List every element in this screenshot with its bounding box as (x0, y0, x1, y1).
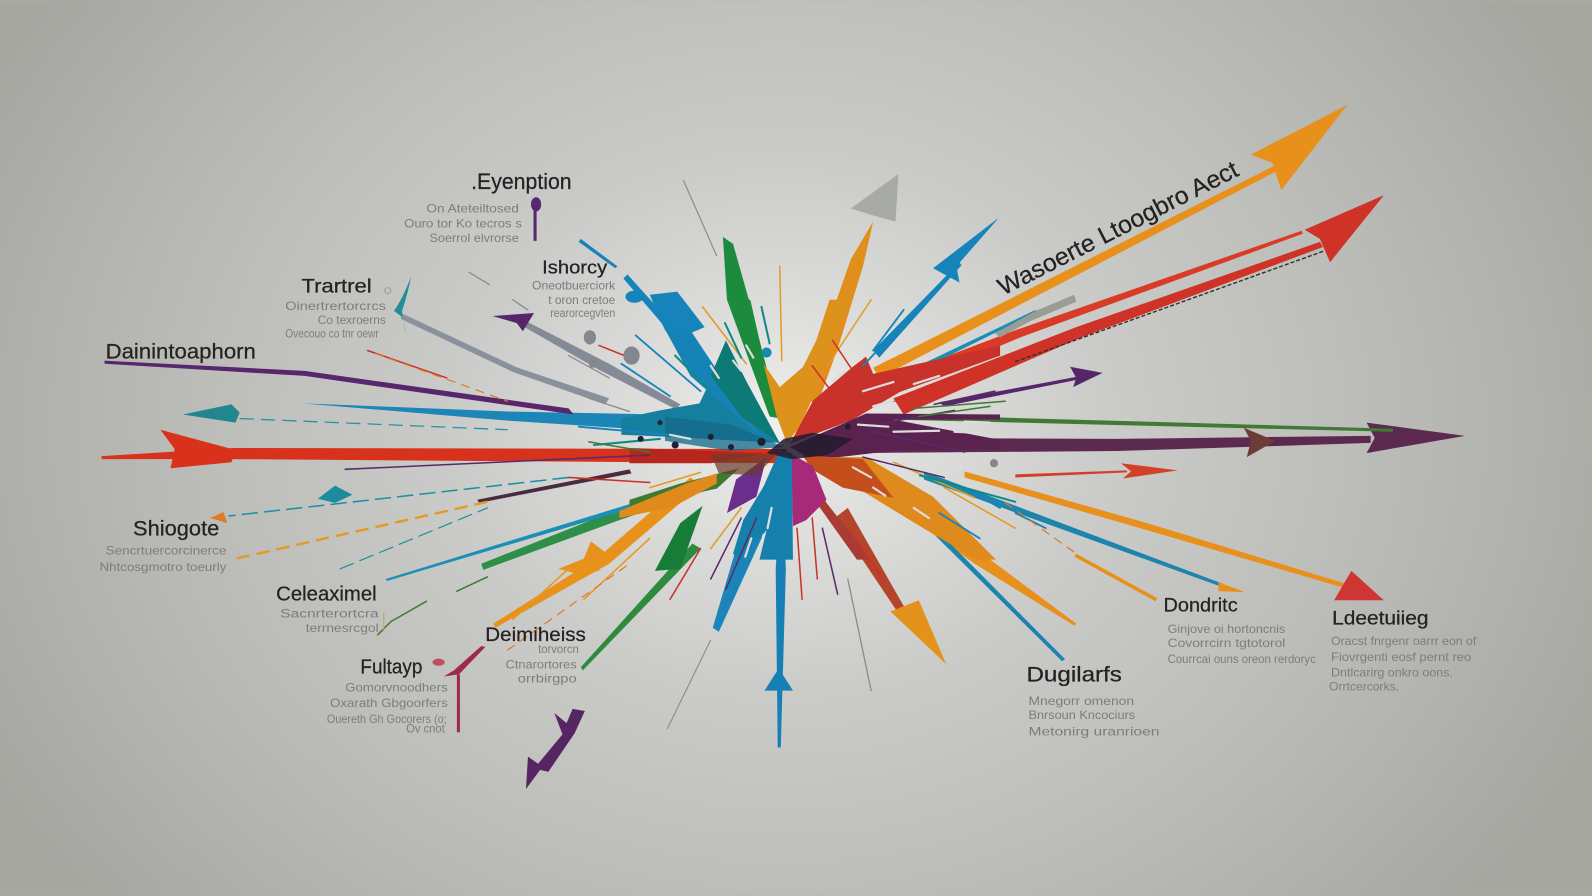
arrow: black dashed line (1015, 251, 1324, 362)
label: Celeaximel: terrnesrcgol (306, 621, 379, 635)
label: Fultayp: Ouereth Gh Gocorers (o; (327, 712, 447, 726)
label: Eyenption: On Ateteiltosed (426, 201, 519, 215)
label: Trartrel (285, 277, 391, 340)
label: Eyenption (404, 169, 572, 245)
arrow: teal left with orange tip (210, 477, 569, 523)
arrow: grey left with teal head (394, 276, 609, 404)
arrow: red top right (873, 195, 1384, 414)
arrow: blue down (765, 477, 793, 748)
arrow: blue lower right thin (936, 532, 1065, 661)
label: Deimiheiss: Ctnarortores (506, 657, 577, 671)
arrow: orange lower right with red head (965, 471, 1384, 600)
label: Ldeetuiieg: Dntlcarirg onkro oons. (1331, 665, 1453, 679)
label: Fultayp: Fultayp (360, 656, 422, 678)
label: Ldeetuiieg: Ldeetuiieg (1332, 609, 1429, 630)
streak: blue left lower (386, 492, 674, 581)
label: Deimiheiss: Deimiheiss (485, 625, 586, 646)
streak: purple to orange dashed (236, 469, 632, 559)
drop: blue near center (761, 347, 772, 358)
arrow: orange lower right thin (883, 488, 1076, 626)
label: Trartrel: Co texroerns (318, 313, 386, 327)
label: Dondritc: Dondritc (1164, 595, 1238, 616)
arrow: blue lower right with orange tip (924, 471, 1245, 592)
arrow: orange lower left (493, 477, 701, 628)
label: Shiogote: Nhtcosgmotro toeurly (100, 560, 227, 574)
label: Dugilarfs: Mnegorr omenon (1029, 694, 1134, 708)
arrow: purple head with grey shaft (492, 313, 680, 409)
label: Fultayp: Oxarath Gbgoorfers (330, 696, 448, 710)
arrow: green left lower (481, 477, 721, 570)
label: Trartrel: Ovecouo co tnr oewr (285, 326, 379, 340)
label: Ishorcy (532, 256, 616, 320)
streak: blue left (303, 403, 660, 431)
label: Dondritc: Covorrcirn tgtotorol (1168, 636, 1285, 650)
label: Eyenption: Soerrol elvrorse (429, 231, 519, 245)
grey drops (584, 330, 998, 467)
arrow: red left main (102, 430, 787, 468)
speckle gaps in burst (640, 345, 990, 557)
label: Deimiheiss (485, 625, 586, 686)
arrow: big orange down right (835, 508, 946, 664)
label: Trartrel: Oinertrertorcrcs (285, 299, 386, 313)
streak: blue down left (667, 498, 772, 729)
label: Dugilarfs (1026, 663, 1159, 738)
label: Dondritc: Courrcai ouns oreon rerdoryc (1168, 652, 1316, 666)
label: Dugilarfs: Metonirg uranrioen (1029, 724, 1159, 738)
streak: thin grey top (683, 180, 717, 256)
label: Deimiheiss: orrbirgpo (518, 672, 577, 686)
label: Ishorcy: t oron cretoe (548, 293, 615, 307)
label: Dainintoaphorn: Dainintoaphorn (106, 340, 256, 364)
label: Eyenption: .Eyenption (471, 169, 572, 194)
arrow: purple right main (853, 423, 1465, 457)
arrow: blue top right (873, 218, 999, 358)
label: Deimiheiss: torvorcn (538, 642, 579, 656)
arrow: green top (723, 237, 780, 419)
label: Celeaximel (276, 583, 379, 635)
streak: teal and grey under orange arrow (902, 295, 1076, 377)
label: Ishorcy: rearorcegvten (550, 306, 615, 320)
marker: tan bracket (383, 612, 385, 632)
label: Shiogote: Shiogote (133, 516, 219, 540)
label: Ldeetuiieg: Fiovrgenti eosf pernt reo (1331, 650, 1471, 664)
streak: orange dashed (1074, 554, 1157, 601)
label: Ldeetuiieg: Orrtcercorks. (1329, 680, 1399, 694)
label: Ishorcy: Ishorcy (542, 256, 608, 277)
arrow: small red right (1015, 463, 1178, 478)
arrow: green lower left (581, 506, 703, 670)
splatter: fine strands (340, 266, 1076, 691)
arrow: purple left top (105, 361, 574, 414)
label: Ishorcy: Oneotbuerciork (532, 279, 616, 293)
label: Dondritc (1164, 595, 1316, 666)
arrow: small purple right (939, 367, 1103, 406)
marker: maroon arrow (433, 646, 485, 732)
arrow: purple bottom (526, 709, 585, 789)
arrow: blue upper left (579, 239, 751, 419)
arrow: green right line (893, 414, 1393, 432)
label: Celeaximel: Sacnrterortcra (280, 607, 379, 621)
arrow: teal left dashed (183, 404, 508, 430)
label: Celeaximel: Celeaximel (276, 583, 377, 605)
label: Fultayp (327, 656, 448, 735)
label: Shiogote: Sencrtuercorcinerce (106, 544, 227, 558)
chart: radiating arrows (102, 105, 1465, 789)
label: Dugilarfs: Dugilarfs (1026, 663, 1122, 687)
arrow: orange top with grey head (802, 174, 899, 402)
label: Ldeetuiieg: Oracst fnrgenr oarrr eon of (1331, 634, 1477, 648)
label: Fultayp: Gomorvnoodhers (345, 681, 448, 695)
label: Dugilarfs: Bnrsoun Kncociurs (1029, 708, 1135, 722)
arrow: orange top right (873, 105, 1347, 378)
label: Dondritc: Ginjove oi hortoncnis (1168, 622, 1285, 636)
label: Trartrel: Trartrel (302, 277, 372, 298)
label: Ldeetuiieg (1329, 609, 1477, 694)
marker: purple pin (531, 197, 541, 241)
label: Shiogote (100, 516, 227, 574)
dark droplets (638, 420, 851, 450)
label: Eyenption: Ouro tor Ko tecros s (404, 217, 522, 231)
label: diagonal arrow title: Wasoerte Ltoogbro Aect (994, 156, 1243, 301)
label: Fultayp: Ov cnot (406, 721, 445, 735)
ink burst center (619, 300, 1000, 560)
